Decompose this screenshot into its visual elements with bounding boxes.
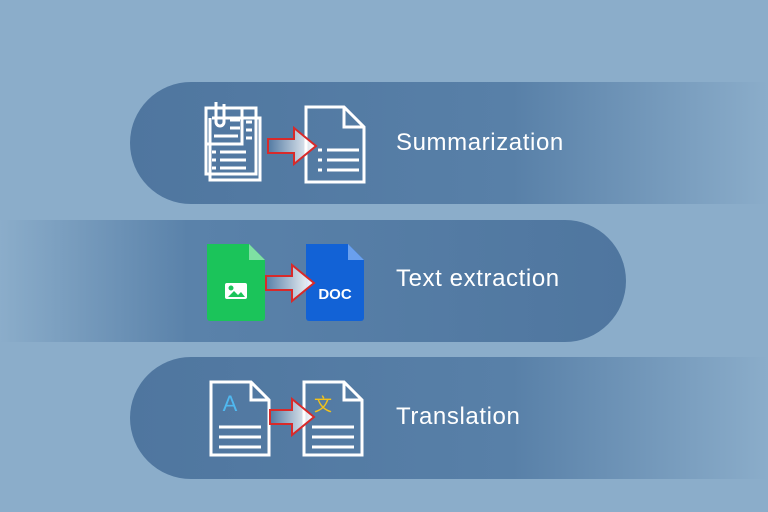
panel: translation xyxy=(130,357,768,479)
arrow 2 xyxy=(266,265,314,301)
panel: summarization xyxy=(130,82,768,204)
icon: DOC file: DOC xyxy=(318,286,352,303)
label: Summarization: Summarization xyxy=(396,129,564,156)
icon: translated doc xyxy=(304,382,362,455)
icon: summary document xyxy=(306,107,364,182)
icon: image file xyxy=(207,244,265,321)
icon: source language doc xyxy=(211,382,269,455)
arrow 3 xyxy=(270,399,314,435)
label: Text extraction: Text extraction xyxy=(396,265,560,292)
icon: source language doc: A xyxy=(223,391,238,416)
label: Translation: Translation xyxy=(396,403,520,430)
icon: DOC file xyxy=(306,244,364,321)
icon: translated doc: 文 xyxy=(314,391,332,417)
icon: stacked documents xyxy=(206,102,260,180)
panel: text extraction xyxy=(0,220,626,342)
arrow 1 xyxy=(268,128,316,164)
